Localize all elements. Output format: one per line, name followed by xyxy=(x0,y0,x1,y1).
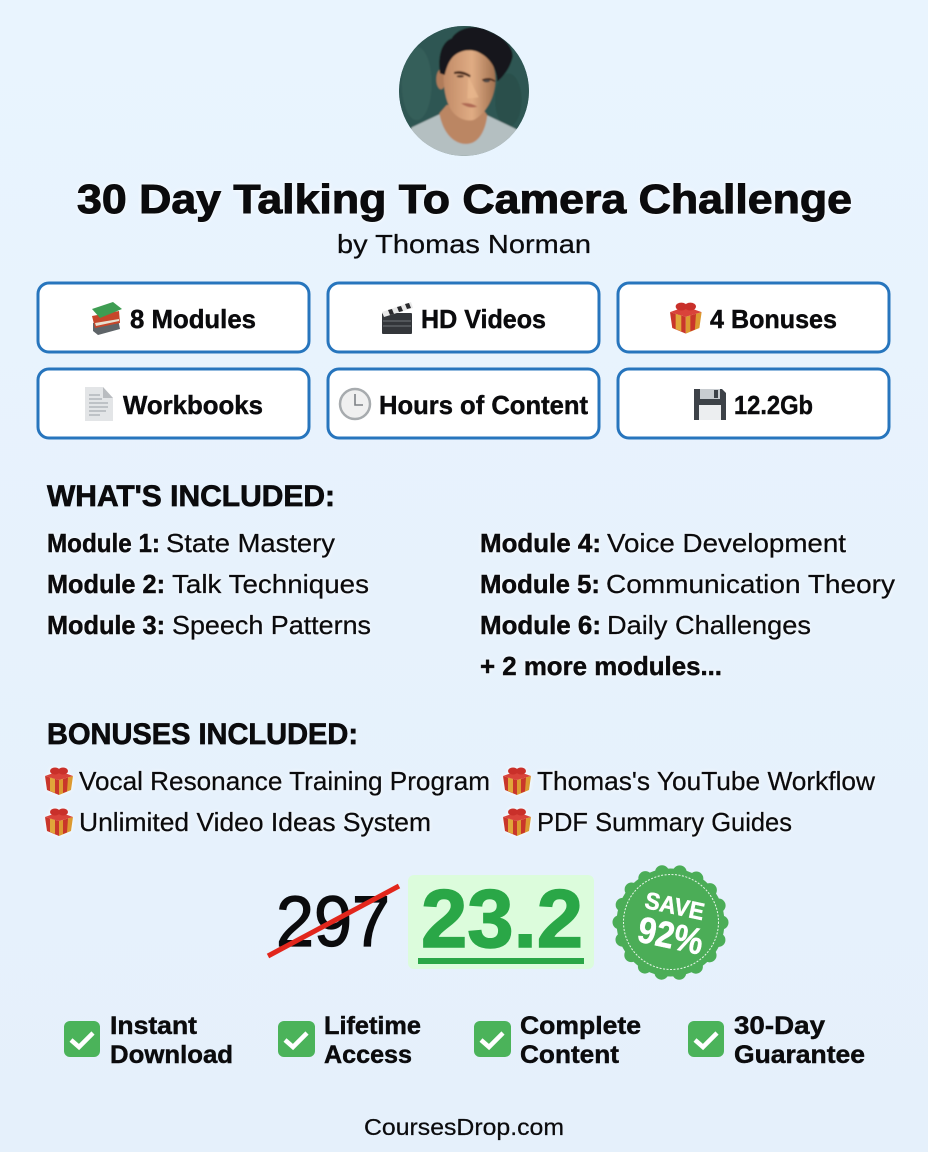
module 1: Module 1: xyxy=(47,528,160,558)
feature box: 8 Modules: 8 Modules xyxy=(130,304,256,334)
feature box: Hours of Content xyxy=(328,369,599,438)
guarantee: instant download: Download xyxy=(110,1041,233,1069)
feature box: 4 Bonuses xyxy=(618,283,889,352)
guarantee: lifetime access: Access xyxy=(324,1041,412,1069)
guarantee: lifetime access: Lifetime xyxy=(324,1012,421,1040)
feature box: Hours of Content: Hours of Content xyxy=(379,390,588,420)
bonus: summary guides: PDF Summary Guides xyxy=(537,807,792,837)
feature box: HD Videos: HD Videos xyxy=(421,304,546,334)
save badge xyxy=(616,868,724,976)
icon: floppy disk xyxy=(694,389,726,420)
module 3: Speech Patterns xyxy=(172,610,371,640)
feature box: 4 Bonuses: 4 Bonuses xyxy=(710,304,837,334)
feature box: 12.2Gb xyxy=(618,369,889,438)
module 3 xyxy=(47,610,371,640)
byline: by Thomas Norman xyxy=(337,229,591,259)
guarantee: complete content: Complete xyxy=(520,1012,641,1040)
guarantee: 30-day guarantee: Guarantee xyxy=(734,1041,865,1069)
icon: clapperboard xyxy=(382,302,413,334)
guarantee: instant download: Instant xyxy=(110,1012,198,1040)
bonus: vocal resonance: Vocal Resonance Training Program xyxy=(79,766,490,796)
title: 30 Day Talking To Camera Challenge xyxy=(77,176,852,222)
guarantee: 30-day guarantee xyxy=(688,1012,865,1069)
icon: document xyxy=(85,387,113,421)
module list xyxy=(47,528,895,681)
module 2: Talk Techniques xyxy=(172,569,369,599)
guarantee: 30-day guarantee: 30-Day xyxy=(734,1012,825,1040)
module 1 xyxy=(47,528,335,558)
new price: 23.2 xyxy=(421,872,583,965)
icon: books xyxy=(92,302,122,335)
module 6: Module 6: xyxy=(480,610,601,640)
module 2: Module 2: xyxy=(47,569,165,599)
bonus list xyxy=(45,766,875,837)
guarantee: complete content xyxy=(474,1012,641,1069)
module 1: State Mastery xyxy=(166,528,335,558)
bonus: youtube workflow: Thomas's YouTube Workflow xyxy=(537,766,875,796)
guarantee: lifetime access xyxy=(278,1012,421,1069)
guarantee: instant download xyxy=(64,1012,233,1069)
save badge: SAVE xyxy=(642,887,707,926)
feature box: Workbooks xyxy=(38,369,309,438)
more modules note: + 2 more modules... xyxy=(480,651,722,681)
module 3: Module 3: xyxy=(47,610,165,640)
module 5: Communication Theory xyxy=(606,569,895,599)
bonus: video ideas: Unlimited Video Ideas System xyxy=(79,807,431,837)
feature box: 8 Modules xyxy=(38,283,309,352)
heading: bonuses included: BONUSES INCLUDED: xyxy=(47,718,358,751)
feature box: HD Videos xyxy=(328,283,599,352)
module 4: Module 4: xyxy=(480,528,601,558)
module 4 xyxy=(480,528,847,558)
feature box: 12.2Gb: 12.2Gb xyxy=(734,390,813,420)
module 5 xyxy=(480,569,895,599)
footer site name: CoursesDrop.com xyxy=(364,1114,564,1140)
guarantee: complete content: Content xyxy=(520,1041,620,1069)
save badge: 92% xyxy=(634,909,707,963)
portrait photo xyxy=(398,25,530,157)
module 5: Module 5: xyxy=(480,569,600,599)
heading: what's included: WHAT'S INCLUDED: xyxy=(47,480,335,513)
module 4: Voice Development xyxy=(607,528,847,558)
old price struck through: 297 xyxy=(276,883,390,962)
icon: clock xyxy=(340,389,370,419)
module 6 xyxy=(480,610,811,640)
icon: gift xyxy=(670,303,702,334)
module 6: Daily Challenges xyxy=(607,610,811,640)
module 2 xyxy=(47,569,369,599)
feature box: Workbooks: Workbooks xyxy=(123,390,263,420)
